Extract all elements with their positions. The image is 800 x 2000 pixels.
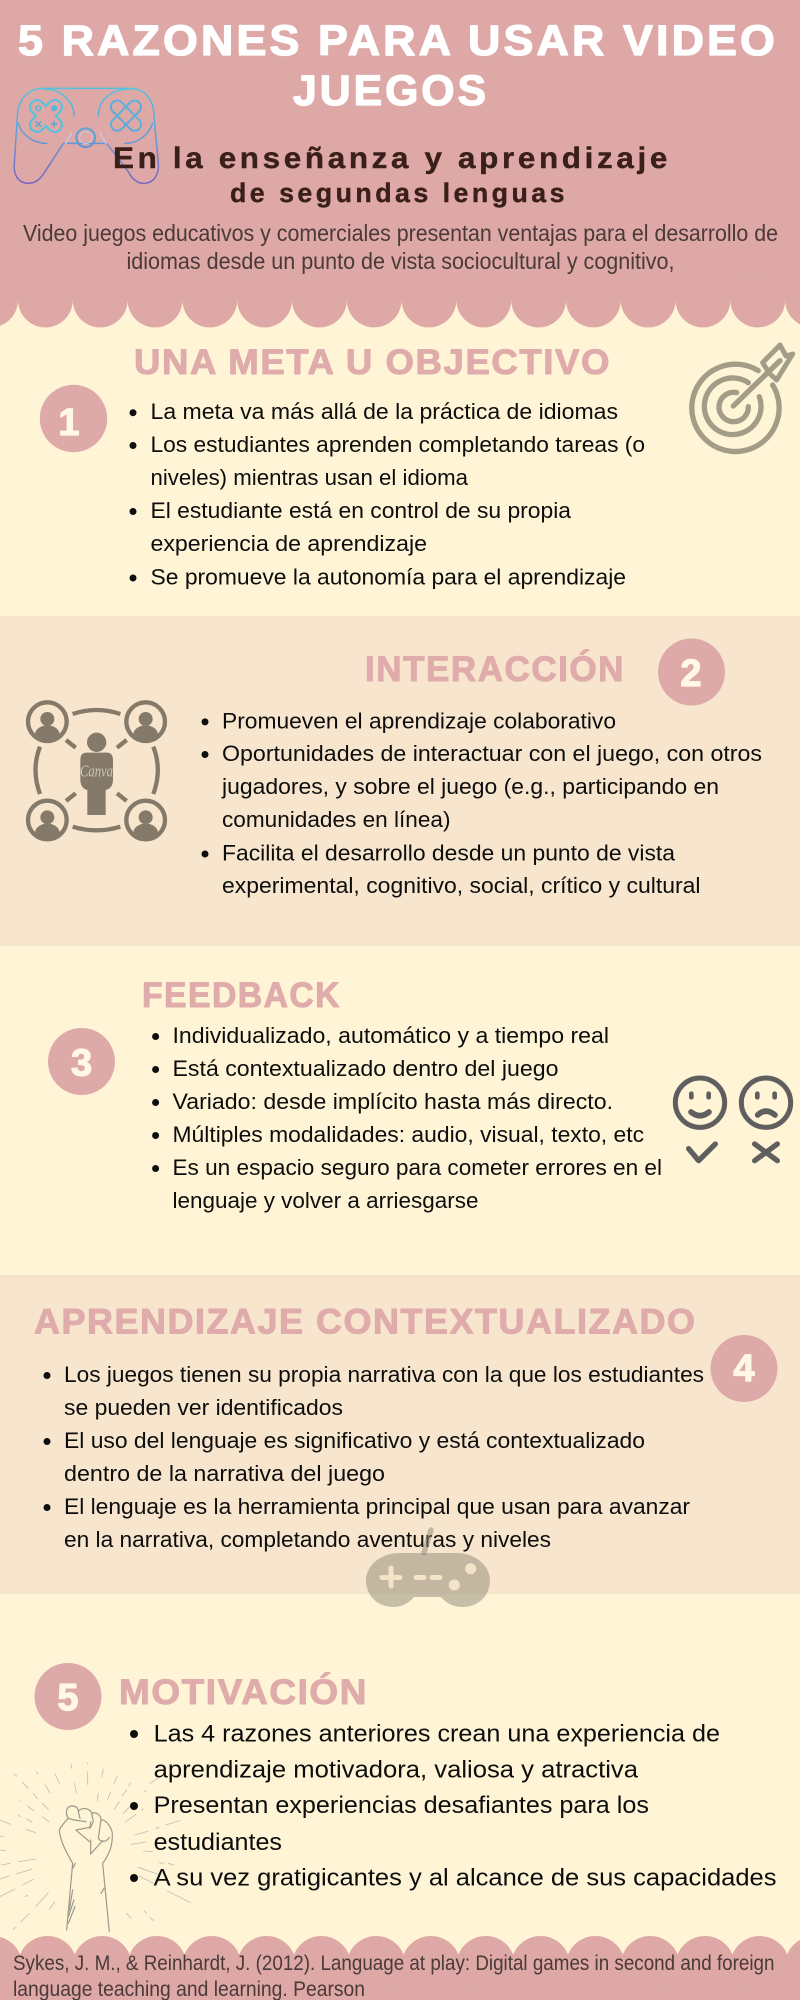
intro text: idiomas desde un punto de vista sociocultural y cognitivo, bbox=[126, 248, 674, 274]
title: 5 RAZONES PARA USAR VIDEO bbox=[18, 17, 778, 65]
heading: feedback: FEEDBACK bbox=[142, 976, 341, 1015]
bullet list: feedback: Es un espacio seguro para cometer errores en el bbox=[172, 1155, 662, 1180]
bullet list: feedback: lenguaje y volver a arriesgarse bbox=[172, 1188, 478, 1213]
bullet list: interaccion: Promueven el aprendizaje colaborativo bbox=[222, 708, 616, 733]
icon: game controller outline bbox=[14, 88, 158, 183]
bullet list: motivacion: A su vez gratigicantes y al alcance de sus capacidades bbox=[154, 1865, 777, 1892]
bullet list: una meta: niveles) mientras usan el idioma bbox=[150, 465, 469, 490]
badge: 3 bbox=[48, 1028, 115, 1095]
badge: 1: 1 bbox=[58, 402, 80, 444]
bullet list: interaccion: Oportunidades de interactuar con el juego, con otros bbox=[222, 741, 762, 766]
badge: 1 bbox=[40, 385, 107, 452]
heading: aprendizaje contextualizado: APRENDIZAJE CONTEXTUALIZADO bbox=[34, 1302, 697, 1342]
bullet list: feedback: Múltiples modalidades: audio, visual, texto, etc bbox=[172, 1122, 644, 1147]
bullet list: feedback: Variado: desde implícito hasta más directo. bbox=[172, 1089, 613, 1114]
bullet list: interaccion bbox=[202, 708, 762, 898]
bullet list: aprendizaje contextualizado: El uso del lenguaje es significativo y está contextualizado bbox=[64, 1428, 645, 1453]
bullet list: motivacion: Presentan experiencias desafiantes para los bbox=[154, 1792, 649, 1819]
panel: header bbox=[0, 0, 800, 327]
panel: motivacion bbox=[0, 1663, 776, 1932]
panel: aprendizaje contextualizado bbox=[0, 1276, 800, 1594]
bullet list: feedback bbox=[152, 1023, 662, 1213]
subtitle: de segundas lenguas bbox=[230, 178, 568, 208]
badge: 5 bbox=[34, 1663, 102, 1730]
bullet list: aprendizaje contextualizado: Los juegos tienen su propia narrativa con la que los estudiantes bbox=[64, 1362, 704, 1387]
bullet list: aprendizaje contextualizado: El lenguaje es la herramienta principal que usan para avanzar bbox=[64, 1494, 690, 1519]
bullet list: una meta: La meta va más allá de la práctica de idiomas bbox=[150, 399, 618, 424]
panel: interaccion bbox=[0, 616, 800, 946]
bullet list: aprendizaje contextualizado: se pueden ver identificados bbox=[64, 1395, 343, 1420]
bullet list: una meta bbox=[130, 399, 645, 590]
icon: connected people bbox=[28, 702, 165, 839]
badge: 3: 3 bbox=[71, 1042, 92, 1084]
bullet list: motivacion: aprendizaje motivadora, valiosa y atractiva bbox=[154, 1757, 639, 1784]
panel: una meta u objetivo bbox=[40, 343, 793, 590]
badge: 5: 5 bbox=[57, 1677, 79, 1719]
bullet list: una meta: experiencia de aprendizaje bbox=[150, 531, 427, 556]
subtitle: En la enseñanza y aprendizaje bbox=[113, 142, 671, 175]
title bbox=[18, 17, 778, 115]
icon: happy and sad faces bbox=[675, 1078, 791, 1161]
bullet list: aprendizaje contextualizado bbox=[44, 1362, 704, 1552]
bullet list: una meta: El estudiante está en control de su propia bbox=[150, 498, 572, 523]
heading: una meta: UNA META U OBJECTIVO bbox=[134, 343, 611, 382]
bullet list: una meta: Los estudiantes aprenden completando tareas (o bbox=[150, 432, 645, 457]
icon: connected people: Canva bbox=[80, 762, 113, 781]
intro text bbox=[23, 220, 778, 274]
icon: target with arrow bbox=[692, 345, 793, 452]
bullet list: interaccion: Facilita el desarrollo desde un punto de vista bbox=[222, 840, 676, 866]
bullet list: aprendizaje contextualizado: dentro de la narrativa del juego bbox=[64, 1461, 385, 1486]
title: JUEGOS bbox=[293, 67, 489, 115]
bullet list: interaccion: comunidades en línea) bbox=[222, 807, 450, 832]
bullet list: motivacion: estudiantes bbox=[154, 1829, 282, 1856]
panel: footer reference bbox=[0, 1936, 800, 2000]
bullet list: aprendizaje contextualizado: en la narrativa, completando aventuras y niveles bbox=[64, 1527, 551, 1552]
bullet list: interaccion: jugadores, y sobre el juego (e.g., participando en bbox=[221, 774, 719, 799]
bullet list: feedback: Está contextualizado dentro del juego bbox=[172, 1056, 558, 1081]
heading: motivacion: MOTIVACIÓN bbox=[119, 1672, 368, 1712]
bullet list: una meta: Se promueve la autonomía para el aprendizaje bbox=[150, 564, 626, 590]
icon: gamepad bbox=[366, 1530, 490, 1607]
panel: feedback bbox=[48, 976, 791, 1213]
reference text bbox=[13, 1951, 774, 2000]
badge: 4: 4 bbox=[733, 1348, 755, 1390]
badge: 4 bbox=[710, 1335, 778, 1402]
bullet list: feedback: Individualizado, automático y a tiempo real bbox=[172, 1023, 609, 1048]
bullet list: motivacion: Las 4 razones anteriores crean una experiencia de bbox=[154, 1721, 720, 1748]
subtitle bbox=[113, 142, 671, 208]
heading: interaccion: INTERACCIÓN bbox=[365, 649, 625, 689]
badge: 2: 2 bbox=[680, 653, 702, 695]
badge: 2 bbox=[658, 638, 725, 706]
bullet list: interaccion: experimental, cognitivo, social, crítico y cultural bbox=[222, 873, 700, 898]
bullet list: motivacion bbox=[130, 1721, 776, 1892]
icon: raised fist with rays bbox=[0, 1763, 191, 1932]
